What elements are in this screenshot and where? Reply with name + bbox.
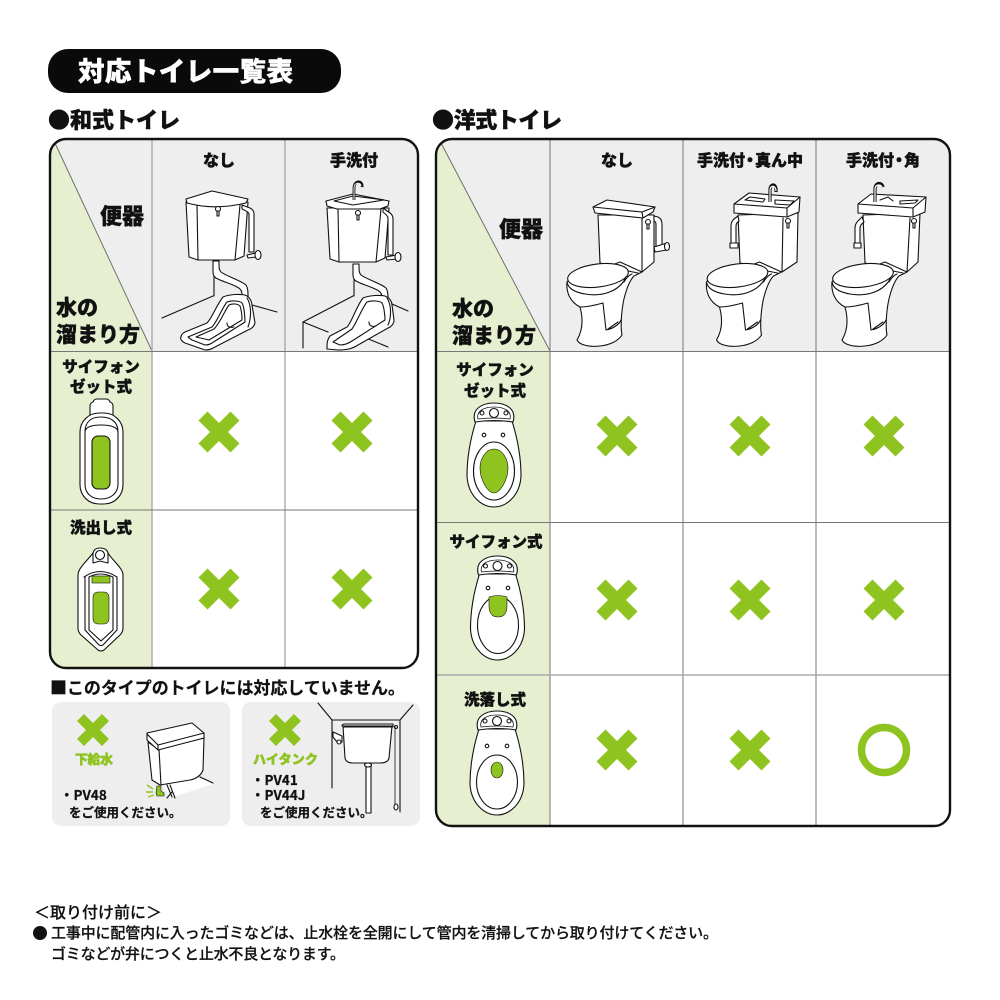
mark: cross [269, 714, 301, 746]
icon: 洋式 サイフォン式 [470, 556, 524, 660]
row label: サイフォン式: サイフォン式 [449, 530, 543, 552]
mark: circle [862, 728, 906, 772]
text: PV48: ・PV48 [60, 784, 107, 804]
panel: ハイタンク [242, 702, 420, 826]
panel: 下給水 [52, 702, 230, 826]
row label: 洗落し式: 洗落し式 [464, 688, 526, 710]
axis label: 水の溜まり方: 水の [56, 292, 98, 322]
row label: サイフォンゼット式: サイフォン [456, 358, 534, 380]
icon: 和式 サイフォンゼット式 [80, 399, 123, 504]
illustration: 和式トイレ なし [162, 191, 277, 350]
label: ハイタンク: ハイタンク [253, 749, 318, 768]
illustration: 洋式トイレ なし [566, 200, 670, 346]
text: PV41 PV44J: ・PV41 [251, 769, 298, 789]
mark: cross [332, 412, 372, 452]
illustration: 洋式トイレ 手洗付・角 [831, 183, 926, 346]
row label: サイフォンゼット式: サイフォン [62, 355, 140, 377]
title: 対応トイレ一覧表 [78, 50, 294, 89]
axis label: 水の溜まり方: 溜まり方 [452, 320, 536, 350]
illustration: 下給水 tank [146, 723, 213, 798]
mark: cross [77, 714, 109, 746]
axis label: 水の溜まり方: 溜まり方 [56, 319, 140, 349]
label: 下給水: 下給水 [75, 749, 113, 768]
text: PV41 PV44J: ・PV44J [251, 784, 305, 804]
row label: 洗出し式: 洗出し式 [70, 516, 132, 538]
mark: cross [730, 730, 770, 770]
icon: 洋式 サイフォンゼット式 [467, 403, 521, 507]
note: 取り付け前に [33, 899, 718, 964]
title [48, 49, 341, 93]
text: PV48: をご使用ください。 [69, 802, 182, 821]
column heading: なし: なし [601, 147, 633, 171]
mark: cross [864, 416, 904, 456]
note: 取り付け前に: 工事中に配管内に入ったゴミなどは、止水栓を全開にして管内を清掃してから取り付けてください。 [51, 922, 718, 943]
mark: cross [198, 412, 240, 452]
heading: 洋式トイレ: ●洋式トイレ [432, 103, 562, 135]
panel: 洋式トイレ table [436, 139, 950, 826]
column heading: 手洗付: 手洗付 [330, 147, 378, 171]
row label: サイフォンゼット式: ゼット式 [70, 375, 132, 397]
illustration: 和式トイレ 手洗付 [303, 182, 408, 350]
text: PV41 PV44J: をご使用ください。 [260, 802, 373, 821]
mark: cross [596, 416, 638, 456]
panel: 和式トイレ table [50, 139, 418, 668]
axis label: 便器: 便器 [100, 199, 144, 231]
heading: 和式トイレ: ●和式トイレ [48, 103, 180, 135]
note: 取り付け前に: ゴミなどが弁につくと止水不良となります。 [51, 943, 345, 964]
axis label: 水の溜まり方: 水の [452, 293, 494, 323]
icon: 和式 洗出し式 [78, 548, 123, 651]
column heading: 手洗付・真ん中: 手洗付・真ん中 [697, 147, 803, 171]
mark: cross [332, 568, 372, 610]
note: 取り付け前に: ＜取り付け前に＞ [34, 899, 162, 923]
mark: cross [730, 580, 770, 620]
mark: cross [864, 580, 904, 620]
axis label: 便器: 便器 [499, 212, 543, 244]
illustration: ハイタンク tank [318, 703, 413, 813]
mark: cross [596, 580, 638, 620]
mark: cross [596, 730, 638, 770]
row label: サイフォンゼット式: ゼット式 [464, 379, 526, 401]
mark: cross [730, 416, 770, 456]
column heading: なし: なし [203, 147, 235, 171]
mark: cross [198, 568, 240, 610]
column heading: 手洗付・角: 手洗付・角 [846, 147, 920, 171]
note heading: 非対応: ■このタイプのトイレには対応していません。 [50, 674, 405, 699]
illustration: 洋式トイレ 手洗付・真ん中 [706, 185, 800, 346]
icon: 洋式 洗落し式 [470, 711, 524, 815]
